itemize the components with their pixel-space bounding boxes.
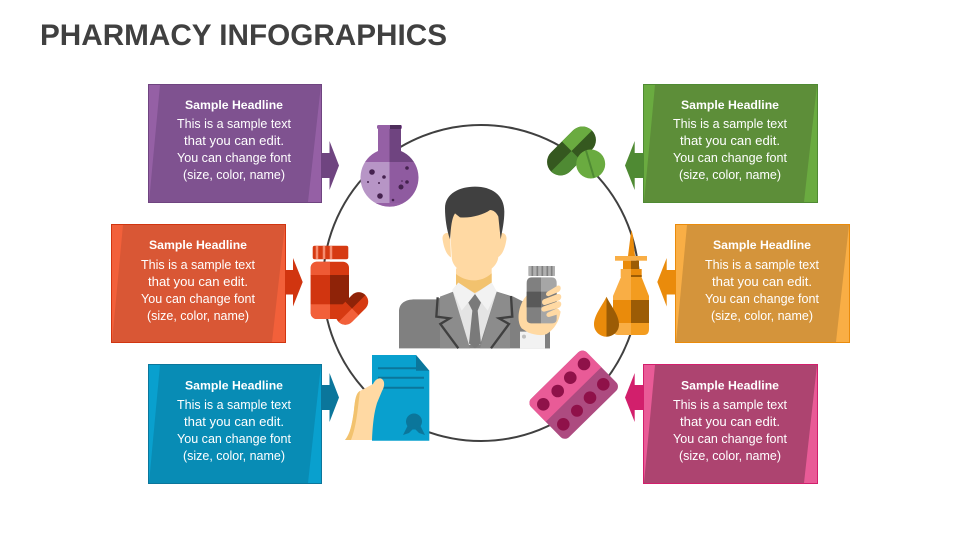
- panel: purple text box: that you can edit.: [184, 134, 284, 148]
- arrow: purple: [322, 141, 339, 190]
- arrow: green: [625, 141, 643, 190]
- panel: orange text box: that you can edit.: [712, 275, 812, 289]
- arrow: pink: [625, 373, 643, 422]
- panel: blue text box: that you can edit.: [184, 415, 284, 429]
- panel: blue text box: [148, 364, 322, 484]
- panel: pink text box: Sample Headline: [681, 378, 779, 392]
- panel: purple text box: (size, color, name): [183, 168, 285, 182]
- panel: blue text box: Sample Headline: [185, 378, 283, 392]
- panel: pink text box: that you can edit.: [680, 415, 780, 429]
- panel: red text box: that you can edit.: [148, 275, 248, 289]
- panel: pink text box: You can change font: [673, 432, 788, 446]
- panel: orange text box: [676, 224, 850, 342]
- shirt: [452, 283, 497, 345]
- bottle: [528, 266, 555, 276]
- panel: green text box: that you can edit.: [680, 134, 780, 148]
- neck: [456, 268, 492, 295]
- panel: pink text box: This is a sample text: [673, 398, 788, 412]
- icon: red medicine bottle: [310, 246, 368, 325]
- title: PHARMACY INFOGRAPHICS: [40, 19, 447, 52]
- icon: green capsule and pill: [547, 126, 606, 178]
- center ring: [323, 125, 639, 441]
- panel: purple text box: [148, 84, 322, 202]
- panel: green text box: Sample Headline: [681, 98, 779, 112]
- lapels: [436, 297, 458, 348]
- panel: red text box: Sample Headline: [149, 238, 247, 252]
- panel: red text box: [112, 224, 286, 342]
- panel: green text box: You can change font: [673, 151, 788, 165]
- arrow: red: [285, 258, 303, 306]
- icon: orange nasal spray bottle: [594, 230, 649, 337]
- panel: red text box: (size, color, name): [147, 309, 249, 323]
- fingers: [546, 286, 561, 296]
- panel: pink text box: [644, 364, 818, 484]
- panel: orange text box: (size, color, name): [711, 309, 813, 323]
- panel: green text box: (size, color, name): [679, 168, 781, 182]
- panel: blue text box: This is a sample text: [177, 398, 292, 412]
- panel: pink text box: (size, color, name): [679, 449, 781, 463]
- panel: purple text box: You can change font: [177, 151, 292, 165]
- hair: [445, 187, 504, 239]
- icon: flask: [360, 125, 418, 207]
- tie: [468, 294, 481, 348]
- panel: orange text box: You can change font: [705, 292, 820, 306]
- illustration: pharmacist holding bottle: [399, 187, 561, 348]
- panel: orange text box: Sample Headline: [713, 238, 811, 252]
- panel: purple text box: Sample Headline: [185, 98, 283, 112]
- arrow: blue: [322, 373, 339, 422]
- panel: red text box: You can change font: [141, 292, 256, 306]
- icon: pink blister pack: [529, 350, 618, 439]
- panel: red text box: This is a sample text: [141, 258, 256, 272]
- panel: blue text box: (size, color, name): [183, 449, 285, 463]
- arm and cuff: [520, 332, 545, 348]
- panel: purple text box: This is a sample text: [177, 117, 292, 131]
- panel: orange text box: This is a sample text: [705, 258, 820, 272]
- panel: green text box: [644, 84, 818, 202]
- panel: green text box: This is a sample text: [673, 117, 788, 131]
- jacket: [399, 292, 550, 348]
- icon: blue document held by hand: [345, 355, 429, 441]
- panel: blue text box: You can change font: [177, 432, 292, 446]
- ears: [442, 233, 451, 257]
- arrow: orange: [657, 258, 675, 306]
- face: [449, 205, 501, 275]
